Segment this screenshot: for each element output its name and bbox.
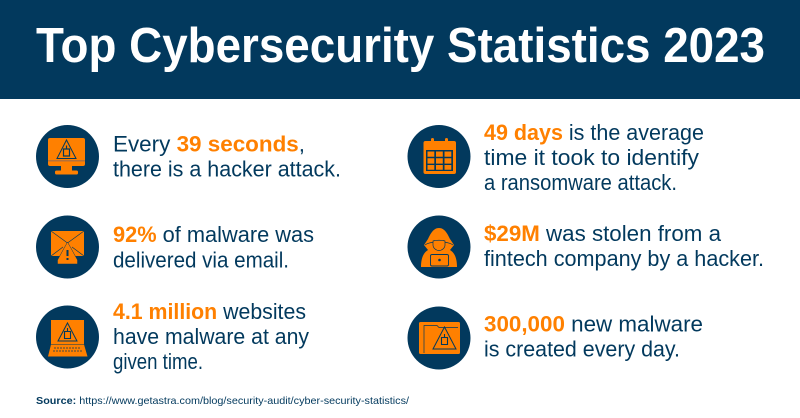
stat: fintech theft [408,216,764,278]
title: Top Cybersecurity Statistics 2023 [36,19,765,73]
icon: folder with warning [408,306,470,370]
stat: hacker attack frequency: there is a hacker attack. [113,156,341,182]
stat: ransomware identification time: time it took to identify [484,145,700,170]
stat: new malware per day [408,306,703,370]
stat: hacker attack frequency [36,125,341,188]
icon: laptop with warning [36,306,99,368]
stat: websites with malware: given time. [113,349,203,374]
stat: malware via email: delivered via email. [113,248,289,272]
stat: new malware per day: is created every day. [484,336,680,362]
text: 49 days is the average [484,120,704,145]
text: 300,000 new malware [484,312,703,336]
stat: ransomware identification time: a ransomware attack. [484,170,677,195]
text: Every 39 seconds, [113,132,305,156]
stat: malware via email [36,216,314,278]
header banner [0,0,800,99]
icon: hooded hacker with laptop [408,216,470,278]
icon: calendar [408,125,470,188]
icon: desktop monitor with warning [36,125,99,188]
text: 92% of malware was [113,222,314,247]
stat: ransomware identification time [408,120,704,195]
stat: websites with malware: have malware at any [113,324,310,349]
text: $29M was stolen from a [484,221,721,246]
stat: fintech theft: fintech company by a hacker. [484,246,764,271]
icon: envelope with alert [36,216,99,278]
text: 4.1 million websites [113,299,306,324]
stat: websites with malware [36,299,310,374]
source line: Source: https://www.getastra.com/blog/security-audit/cyber-security-statistics/ [36,395,409,407]
